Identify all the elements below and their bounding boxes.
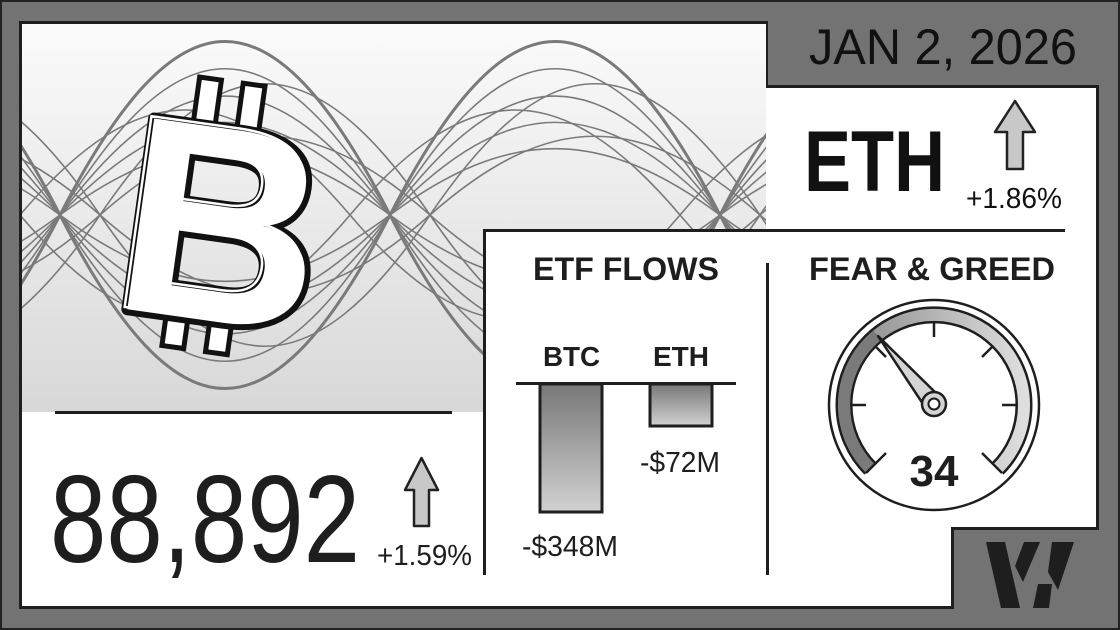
BTC price: 88,892 (50, 451, 360, 589)
icon: bitcoin symbol (121, 74, 312, 358)
logo: W (986, 542, 1074, 608)
panel: fear & greed: FEAR & GREED (809, 251, 1055, 287)
panel: ETF flows (483, 229, 1065, 575)
panel: ETF flows: ETF FLOWS (533, 251, 719, 287)
icon: BTC up arrow (405, 458, 438, 526)
icon: bitcoin symbol: B (100, 57, 344, 394)
date: JAN 2, 2026 (809, 19, 1077, 75)
divider (766, 263, 769, 575)
panel: ETH price: +1.86% (966, 183, 1062, 215)
panel: ETH price (804, 101, 1062, 215)
divider under image (55, 411, 452, 414)
panel: ETF flows: ETH (653, 341, 709, 372)
panel: ETF flows: -$72M (640, 447, 720, 479)
panel: ETH price: ETH (804, 114, 945, 210)
panel: ETF flows: -$348M (522, 531, 618, 563)
panel: fear & greed (809, 251, 1055, 510)
icon: bitcoin symbol: B (98, 55, 341, 392)
BTC change: +1.59% (377, 540, 472, 572)
hero image: waves and bitcoin (22, 24, 766, 412)
panel: ETF flows: BTC (543, 341, 600, 372)
panel: fear & greed: 34 (910, 447, 959, 496)
